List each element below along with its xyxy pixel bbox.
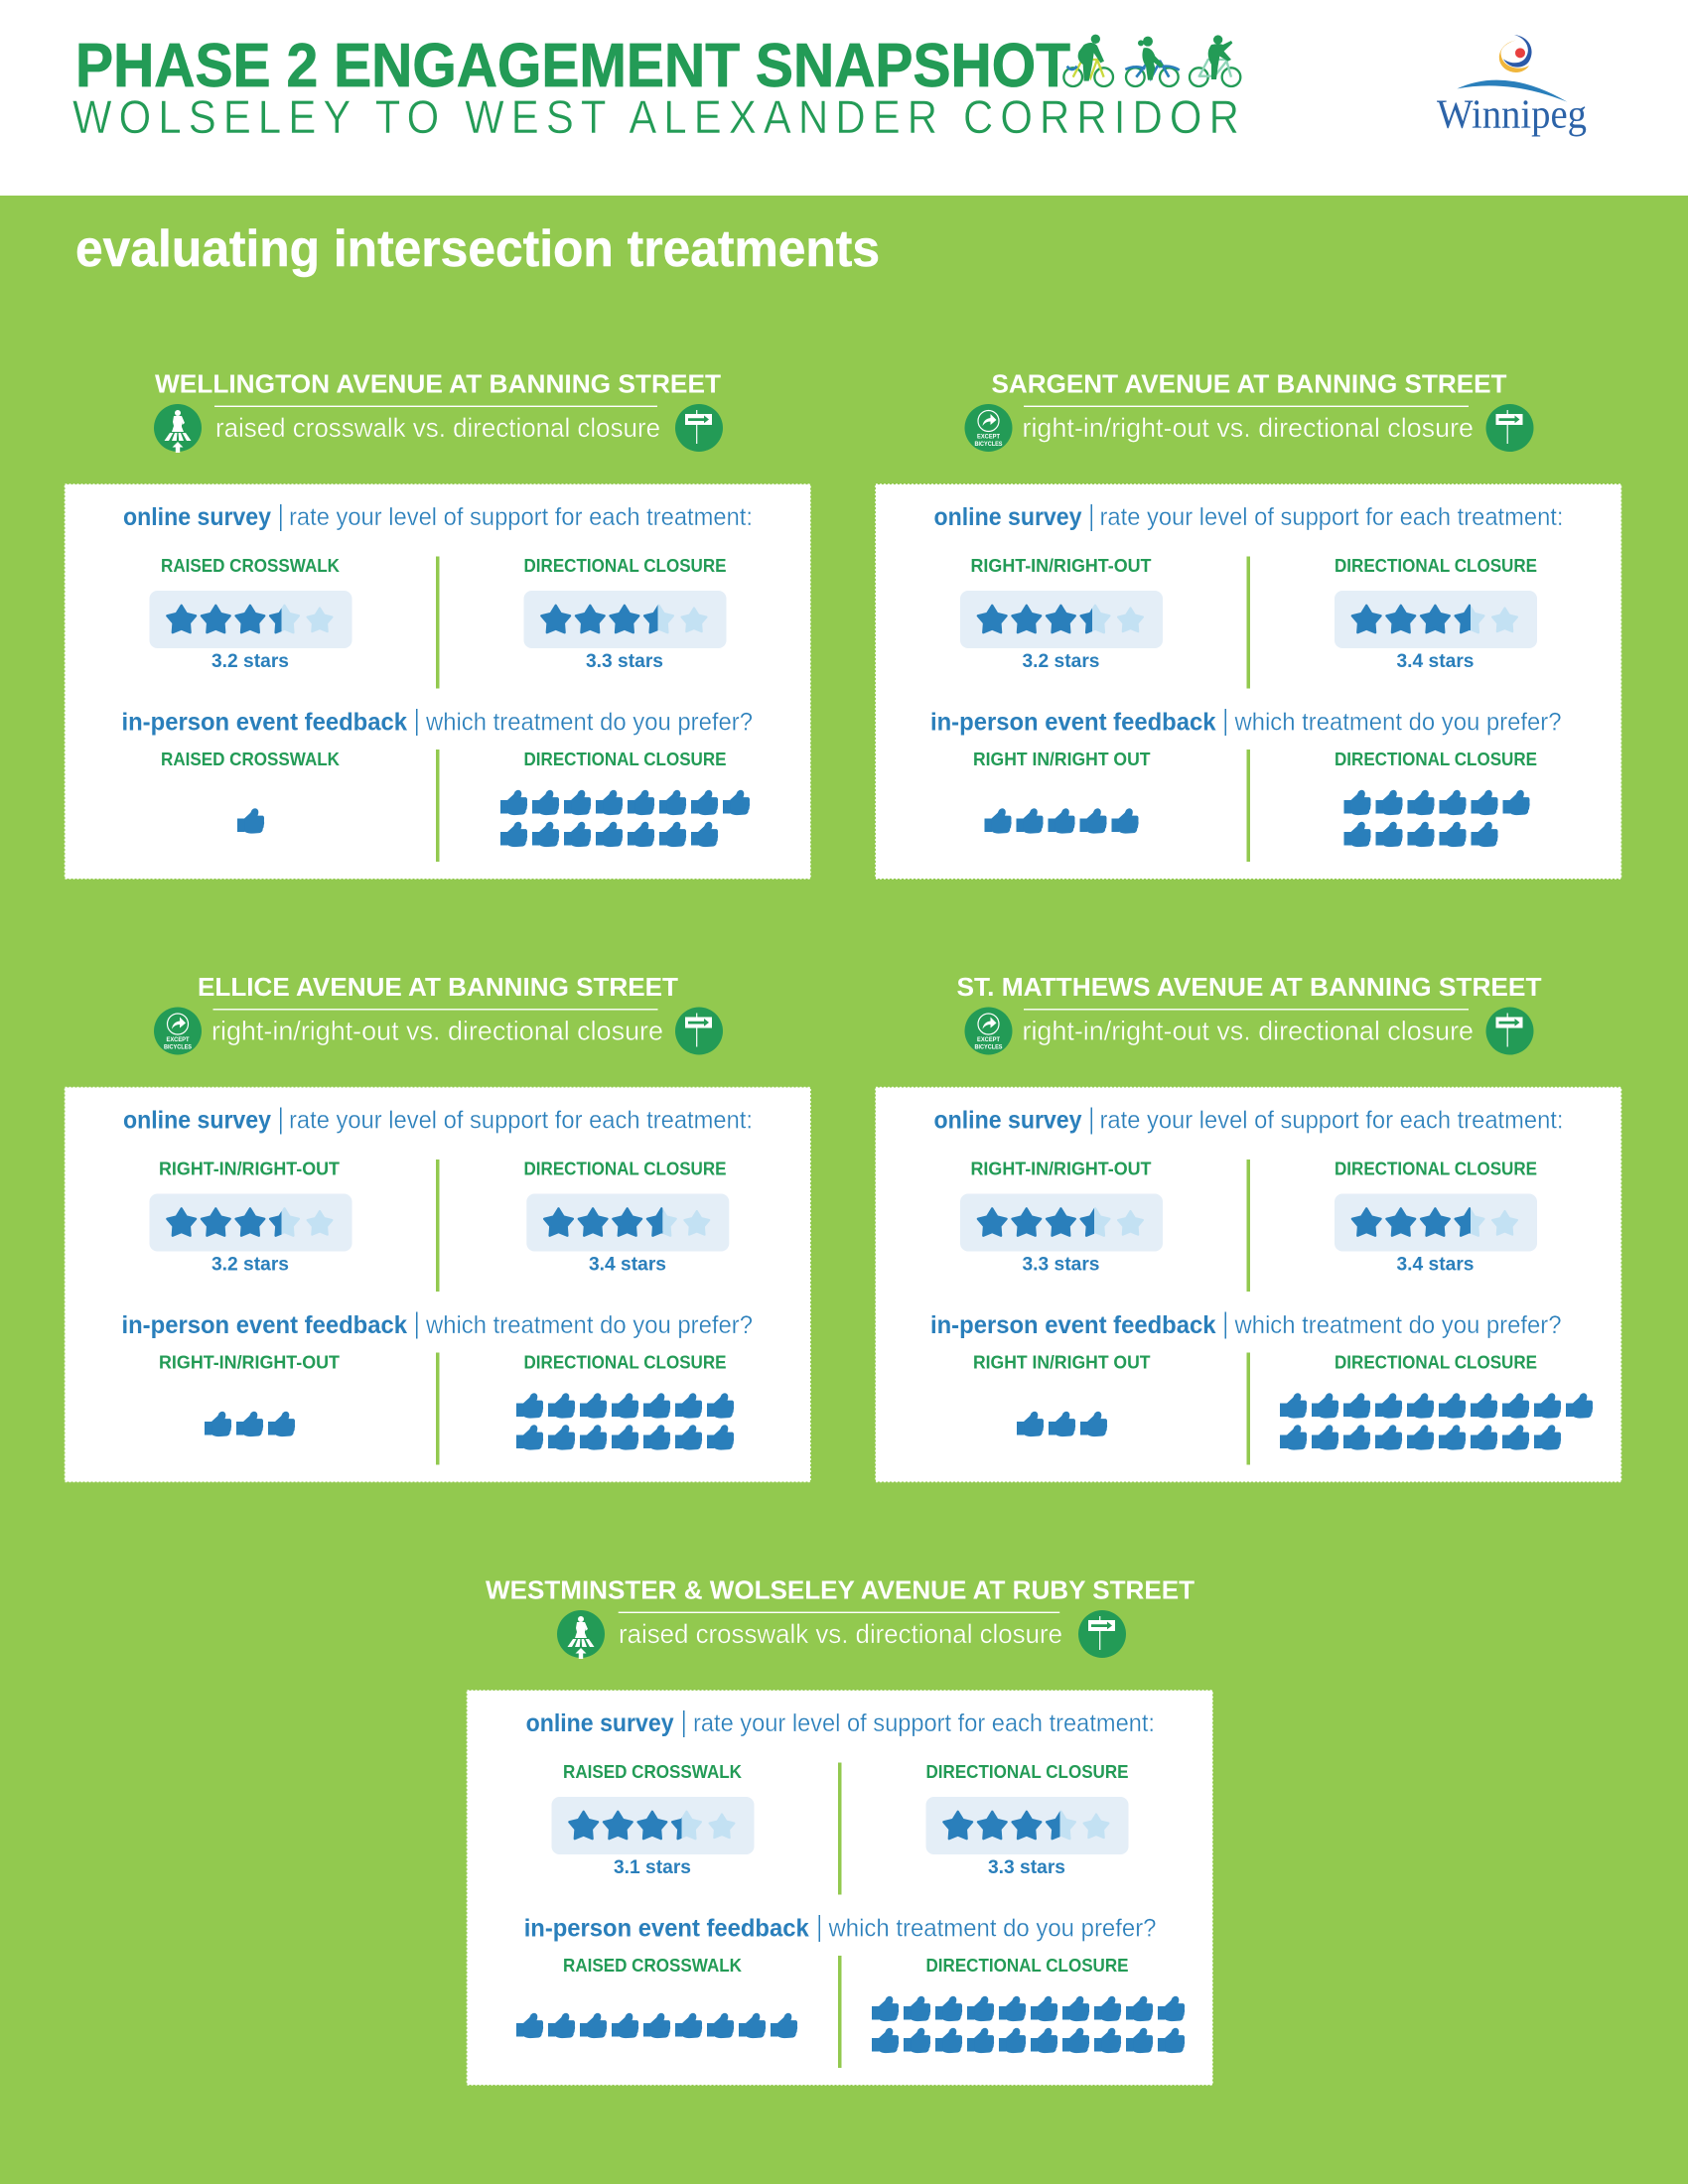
star rating: directional closure <box>526 1193 729 1251</box>
logo: Winnipeg: Winnipeg <box>1437 91 1587 137</box>
rating value: 3.4 stars <box>1396 651 1474 672</box>
rating value: 3.3 stars <box>1023 1255 1100 1275</box>
section heading: evaluating intersection treatments <box>75 220 880 278</box>
label: right-in/right-out: RIGHT-IN/RIGHT-OUT <box>971 555 1152 576</box>
section: Sargent Avenue at Banning Street <box>876 369 1620 879</box>
star rating: directional closure <box>524 591 727 648</box>
icon: except bicycles <box>965 404 1013 452</box>
label: directional closure: DIRECTIONAL CLOSURE <box>524 555 727 576</box>
thumbs: raised crosswalk <box>237 809 264 833</box>
online survey heading: online survey <box>123 503 271 531</box>
section: Wellington Avenue at Banning Street <box>66 369 810 879</box>
label: directional closure: DIRECTIONAL CLOSURE <box>524 749 727 769</box>
intersection title: ELLICE AVENUE AT BANNING STREET <box>198 972 678 1002</box>
rating value: 3.2 stars <box>211 651 289 672</box>
in-person feedback heading <box>121 1311 753 1339</box>
icon: except bicycles: EXCEPT <box>977 1036 1000 1043</box>
icon: directional closure sign <box>675 404 723 452</box>
in-person feedback heading: which treatment do you prefer? <box>425 1311 753 1339</box>
online survey heading: rate your level of support for each treatment: <box>289 503 753 531</box>
icon: except bicycles: EXCEPT <box>977 433 1000 441</box>
star rating: directional closure <box>925 1797 1128 1854</box>
rating value: 3.4 stars <box>1396 1255 1474 1275</box>
label: directional closure: DIRECTIONAL CLOSURE <box>1335 749 1537 769</box>
panel: results <box>66 1088 810 1481</box>
label: raised crosswalk: RAISED CROSSWALK <box>161 555 341 576</box>
star rating: directional closure <box>1335 591 1537 648</box>
star rating: raised crosswalk <box>149 591 352 648</box>
label: right-in/right-out: RIGHT-IN/RIGHT-OUT <box>159 1158 341 1179</box>
label: raised crosswalk: RAISED CROSSWALK <box>563 1761 743 1782</box>
icon: directional closure sign <box>1485 1007 1533 1054</box>
in-person feedback heading: in-person event feedback <box>524 1914 809 1942</box>
icon: except bicycles: EXCEPT <box>167 1036 189 1043</box>
logo: Winnipeg <box>1437 35 1587 136</box>
in-person feedback heading: in-person event feedback <box>930 1311 1216 1339</box>
treatment comparison: right-in/right-out vs. directional closure <box>1023 1017 1474 1046</box>
in-person feedback heading <box>930 1311 1561 1339</box>
icon: except bicycles: BICYCLES <box>164 1044 193 1050</box>
online survey heading: rate your level of support for each treatment: <box>693 1709 1155 1737</box>
icon: raised crosswalk <box>154 404 202 453</box>
label: directional closure: DIRECTIONAL CLOSURE <box>524 1158 727 1179</box>
label: directional closure: DIRECTIONAL CLOSURE <box>524 1352 727 1372</box>
rating value: 3.3 stars <box>988 1857 1065 1878</box>
intersection title: WELLINGTON AVENUE AT BANNING STREET <box>155 369 721 399</box>
thumbs: right in/right out <box>985 809 1138 833</box>
thumbs: directional closure <box>516 1394 734 1449</box>
section: Ellice Avenue at Banning Street <box>66 972 810 1481</box>
treatment comparison: raised crosswalk vs. directional closure <box>215 413 660 443</box>
subtitle: WOLSELEY TO WEST ALEXANDER CORRIDOR <box>72 90 1246 143</box>
online survey heading: online survey <box>933 1106 1082 1134</box>
thumbs: directional closure <box>1344 790 1529 847</box>
in-person feedback heading: in-person event feedback <box>121 709 407 737</box>
panel: results <box>876 484 1620 879</box>
online survey heading: rate your level of support for each treatment: <box>1100 1106 1563 1134</box>
online survey heading: rate your level of support for each treatment: <box>289 1106 753 1134</box>
in-person feedback heading: which treatment do you prefer? <box>1234 1311 1561 1339</box>
star rating: right-in/right-out <box>149 1193 352 1251</box>
label: directional closure: DIRECTIONAL CLOSURE <box>1335 555 1537 576</box>
icon: directional closure sign <box>1078 1610 1126 1658</box>
section: Westminster & Wolseley Avenue at Ruby Street <box>467 1574 1212 2085</box>
in-person feedback heading: in-person event feedback <box>121 1311 407 1339</box>
label: right in/right out: RIGHT IN/RIGHT OUT <box>973 1352 1151 1372</box>
rating value: 3.2 stars <box>211 1255 289 1275</box>
section: St. Matthews Avenue at Banning Street <box>876 972 1620 1481</box>
label: right-in/right-out: RIGHT-IN/RIGHT-OUT <box>971 1158 1152 1179</box>
label: directional closure: DIRECTIONAL CLOSURE <box>925 1761 1128 1782</box>
panel: results <box>876 1088 1620 1481</box>
icon: three cyclists <box>1063 35 1240 86</box>
rating value: 3.2 stars <box>1023 651 1100 672</box>
in-person feedback heading: in-person event feedback <box>930 709 1216 737</box>
rating value: 3.1 stars <box>614 1857 691 1878</box>
in-person feedback heading: which treatment do you prefer? <box>425 709 753 737</box>
treatment comparison: raised crosswalk vs. directional closure <box>619 1619 1062 1649</box>
label: right in/right out: RIGHT IN/RIGHT OUT <box>973 749 1151 769</box>
online survey heading: rate your level of support for each treatment: <box>1100 503 1563 531</box>
thumbs: directional closure <box>872 1996 1185 2053</box>
icon: raised crosswalk <box>557 1610 605 1659</box>
icon: except bicycles <box>965 1007 1013 1054</box>
panel: results <box>66 484 810 879</box>
in-person feedback heading <box>930 709 1561 737</box>
in-person feedback heading: which treatment do you prefer? <box>1234 709 1561 737</box>
star rating: right-in/right-out <box>960 1193 1163 1251</box>
treatment comparison: right-in/right-out vs. directional closure <box>1023 413 1474 443</box>
label: raised crosswalk: RAISED CROSSWALK <box>563 1955 743 1976</box>
star rating: directional closure <box>1335 1193 1537 1251</box>
in-person feedback heading: which treatment do you prefer? <box>828 1914 1156 1942</box>
thumbs: raised crosswalk <box>516 2013 797 2038</box>
intersection title: WESTMINSTER & WOLSELEY AVENUE AT RUBY STREET <box>486 1574 1195 1604</box>
thumbs: right-in/right-out <box>205 1412 295 1436</box>
label: directional closure: DIRECTIONAL CLOSURE <box>925 1955 1128 1976</box>
in-person feedback heading <box>121 709 753 737</box>
icon: except bicycles: BICYCLES <box>975 1044 1003 1050</box>
rating value: 3.3 stars <box>586 651 663 672</box>
online survey heading: online survey <box>933 503 1082 531</box>
icon: except bicycles <box>154 1007 202 1054</box>
thumbs: directional closure <box>500 790 750 847</box>
intersection title: ST. MATTHEWS AVENUE AT BANNING STREET <box>957 972 1542 1002</box>
main title: PHASE 2 ENGAGEMENT SNAPSHOT <box>75 32 1070 100</box>
star rating: raised crosswalk <box>552 1797 755 1854</box>
label: directional closure: DIRECTIONAL CLOSURE <box>1335 1352 1537 1372</box>
star rating: right-in/right-out <box>960 591 1163 648</box>
intersection title: SARGENT AVENUE AT BANNING STREET <box>991 369 1507 399</box>
icon: directional closure sign <box>675 1007 723 1054</box>
in-person feedback heading <box>524 1914 1156 1942</box>
panel: results <box>467 1691 1212 2085</box>
thumbs: directional closure <box>1280 1394 1593 1449</box>
icon: except bicycles: BICYCLES <box>975 441 1003 448</box>
thumbs: right in/right out <box>1017 1412 1107 1436</box>
label: raised crosswalk: RAISED CROSSWALK <box>161 749 341 769</box>
online survey heading: online survey <box>123 1106 271 1134</box>
label: right-in/right-out: RIGHT-IN/RIGHT-OUT <box>159 1352 341 1372</box>
treatment comparison: right-in/right-out vs. directional closure <box>211 1017 663 1046</box>
icon: directional closure sign <box>1485 404 1533 452</box>
label: directional closure: DIRECTIONAL CLOSURE <box>1335 1158 1537 1179</box>
rating value: 3.4 stars <box>589 1255 666 1275</box>
online survey heading: online survey <box>526 1709 674 1737</box>
